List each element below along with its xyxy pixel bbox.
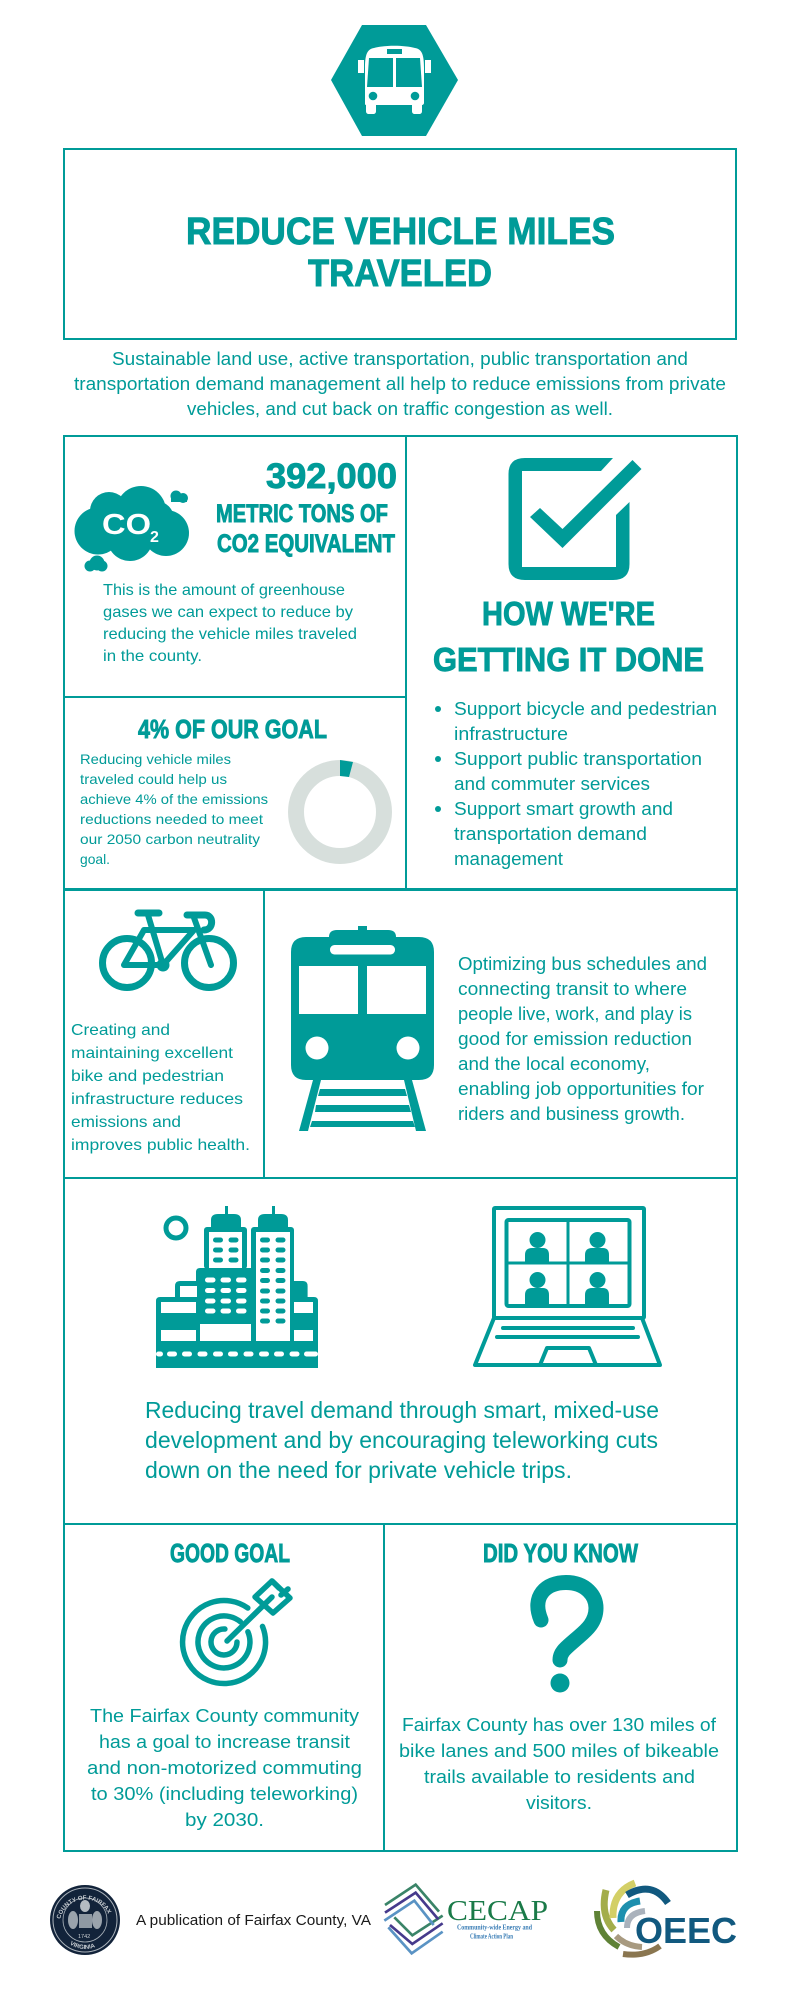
- logo: county seal: [50, 1885, 120, 1955]
- heading: 4% OF OUR GOAL: [138, 714, 327, 744]
- title: TRAVELED: [308, 253, 492, 295]
- icon: bicycle: [102, 913, 234, 988]
- bullet list: Support bicycle and pedestrian: [454, 699, 717, 719]
- description: Reducing vehicle miles: [80, 751, 231, 767]
- logo: OEEC: [597, 1883, 737, 1955]
- description: visitors.: [526, 1793, 592, 1813]
- description: Fairfax County has over 130 miles of: [402, 1715, 717, 1735]
- stat description: gases we can expect to reduce by: [103, 604, 353, 621]
- panel: 4% of our goal: [64, 697, 406, 889]
- icon: city: [156, 1206, 318, 1368]
- bullet list: [435, 699, 717, 869]
- panel: bike infrastructure: [64, 890, 264, 1178]
- bullet list: Support public transportation: [454, 749, 702, 769]
- description: [399, 1715, 719, 1813]
- panel: good goal: [64, 1524, 384, 1851]
- stat description: [103, 582, 357, 665]
- bullet list: transportation demand: [454, 824, 647, 844]
- description: good for emission reduction: [458, 1029, 692, 1049]
- intro text: Sustainable land use, active transportation, public transportation and: [112, 349, 688, 369]
- description: bike lanes and 500 miles of bikeable: [399, 1741, 719, 1761]
- stat description: reducing the vehicle miles traveled: [103, 626, 357, 643]
- panel: how we're getting it done: [406, 436, 737, 889]
- description: Reducing travel demand through smart, mixed-use: [145, 1397, 659, 1423]
- description: Optimizing bus schedules and: [458, 954, 707, 974]
- logo: CECAP: CECAP: [447, 1896, 548, 1927]
- donut chart: [296, 760, 384, 856]
- description: [458, 954, 707, 1124]
- heading: DID YOU KNOW: [483, 1538, 638, 1568]
- icon: train: [291, 926, 434, 1131]
- description: to 30% (including teleworking): [91, 1784, 358, 1804]
- description: development and by encouraging teleworking cuts: [145, 1427, 658, 1453]
- icon: CO2 cloud: CO: [102, 509, 151, 541]
- intro text: vehicles, and cut back on traffic congestion as well.: [187, 399, 613, 419]
- bullet list: management: [454, 849, 563, 869]
- heading: GOOD GOAL: [170, 1538, 290, 1568]
- description: traveled could help us: [80, 771, 227, 787]
- bullet list: infrastructure: [454, 724, 568, 744]
- stat description: This is the amount of greenhouse: [103, 582, 345, 599]
- description: [145, 1397, 659, 1483]
- description: achieve 4% of the emissions: [80, 791, 268, 807]
- logo: CECAP: Community-wide Energy and: [457, 1922, 533, 1932]
- description: riders and business growth.: [458, 1104, 685, 1124]
- bullet list: Support smart growth and: [454, 799, 673, 819]
- heading: GETTING IT DONE: [433, 641, 704, 678]
- description: down on the need for private vehicle trips.: [145, 1457, 572, 1483]
- logo: county seal: COUNTY OF FAIRFAX: [56, 1895, 112, 1918]
- description: goal.: [80, 851, 110, 867]
- icon: bus in hexagon: [331, 25, 458, 136]
- icon: checkbox: [508, 458, 642, 580]
- description: our 2050 carbon neutrality: [80, 831, 260, 847]
- panel: travel demand: [64, 1178, 737, 1524]
- title: [186, 211, 615, 295]
- description: and the local economy,: [458, 1054, 650, 1074]
- description: [80, 751, 268, 867]
- heading: [433, 595, 704, 678]
- description: maintaining excellent: [71, 1045, 234, 1062]
- title: REDUCE VEHICLE MILES: [186, 211, 615, 253]
- icon: CO2 cloud: 2: [150, 529, 159, 546]
- stat description: in the county.: [103, 648, 202, 665]
- publication credit: A publication of Fairfax County, VA: [136, 1912, 371, 1929]
- description: infrastructure reduces: [71, 1091, 243, 1108]
- icon: CO2 cloud: [74, 486, 189, 572]
- description: [71, 1022, 250, 1154]
- icon: laptop: [475, 1208, 660, 1365]
- description: emissions and: [71, 1114, 181, 1131]
- description: and non-motorized commuting: [87, 1758, 362, 1778]
- logo: OEEC: OEEC: [635, 1910, 737, 1951]
- description: people live, work, and play is: [458, 1004, 692, 1024]
- stat label: CO2 EQUIVALENT: [217, 530, 395, 558]
- description: improves public health.: [71, 1137, 250, 1154]
- description: connecting transit to where: [458, 979, 687, 999]
- panel: emissions stat: [64, 436, 406, 697]
- intro text: [74, 349, 726, 419]
- bullet list: and commuter services: [454, 774, 650, 794]
- description: Creating and: [71, 1022, 170, 1039]
- logo: county seal: 1742: [78, 1934, 90, 1940]
- intro text: transportation demand management all help to reduce emissions from private: [74, 374, 726, 394]
- panel: transit: [264, 890, 737, 1178]
- logo: CECAP: [384, 1885, 548, 1953]
- logo mark: [384, 1885, 443, 1953]
- stat label: METRIC TONS OF: [216, 500, 388, 528]
- description: has a goal to increase transit: [99, 1732, 350, 1752]
- description: trails available to residents and: [424, 1767, 695, 1787]
- panel: did you know: [384, 1524, 737, 1851]
- description: reductions needed to meet: [80, 811, 263, 827]
- stat label: [216, 500, 395, 558]
- description: enabling job opportunities for: [458, 1079, 704, 1099]
- description: bike and pedestrian: [71, 1068, 224, 1085]
- title box: [64, 149, 736, 339]
- description: The Fairfax County community: [90, 1706, 359, 1726]
- heading: HOW WE'RE: [482, 595, 655, 632]
- icon: question mark: [538, 1582, 596, 1692]
- logo: CECAP: Climate Action Plan: [470, 1932, 514, 1940]
- description: by 2030.: [185, 1810, 264, 1830]
- icon: target with arrow: [183, 1581, 290, 1684]
- description: [87, 1706, 362, 1830]
- stat: 392,000: 392,000: [266, 457, 397, 496]
- logo: county seal: VIRGINIA: [71, 1940, 95, 1950]
